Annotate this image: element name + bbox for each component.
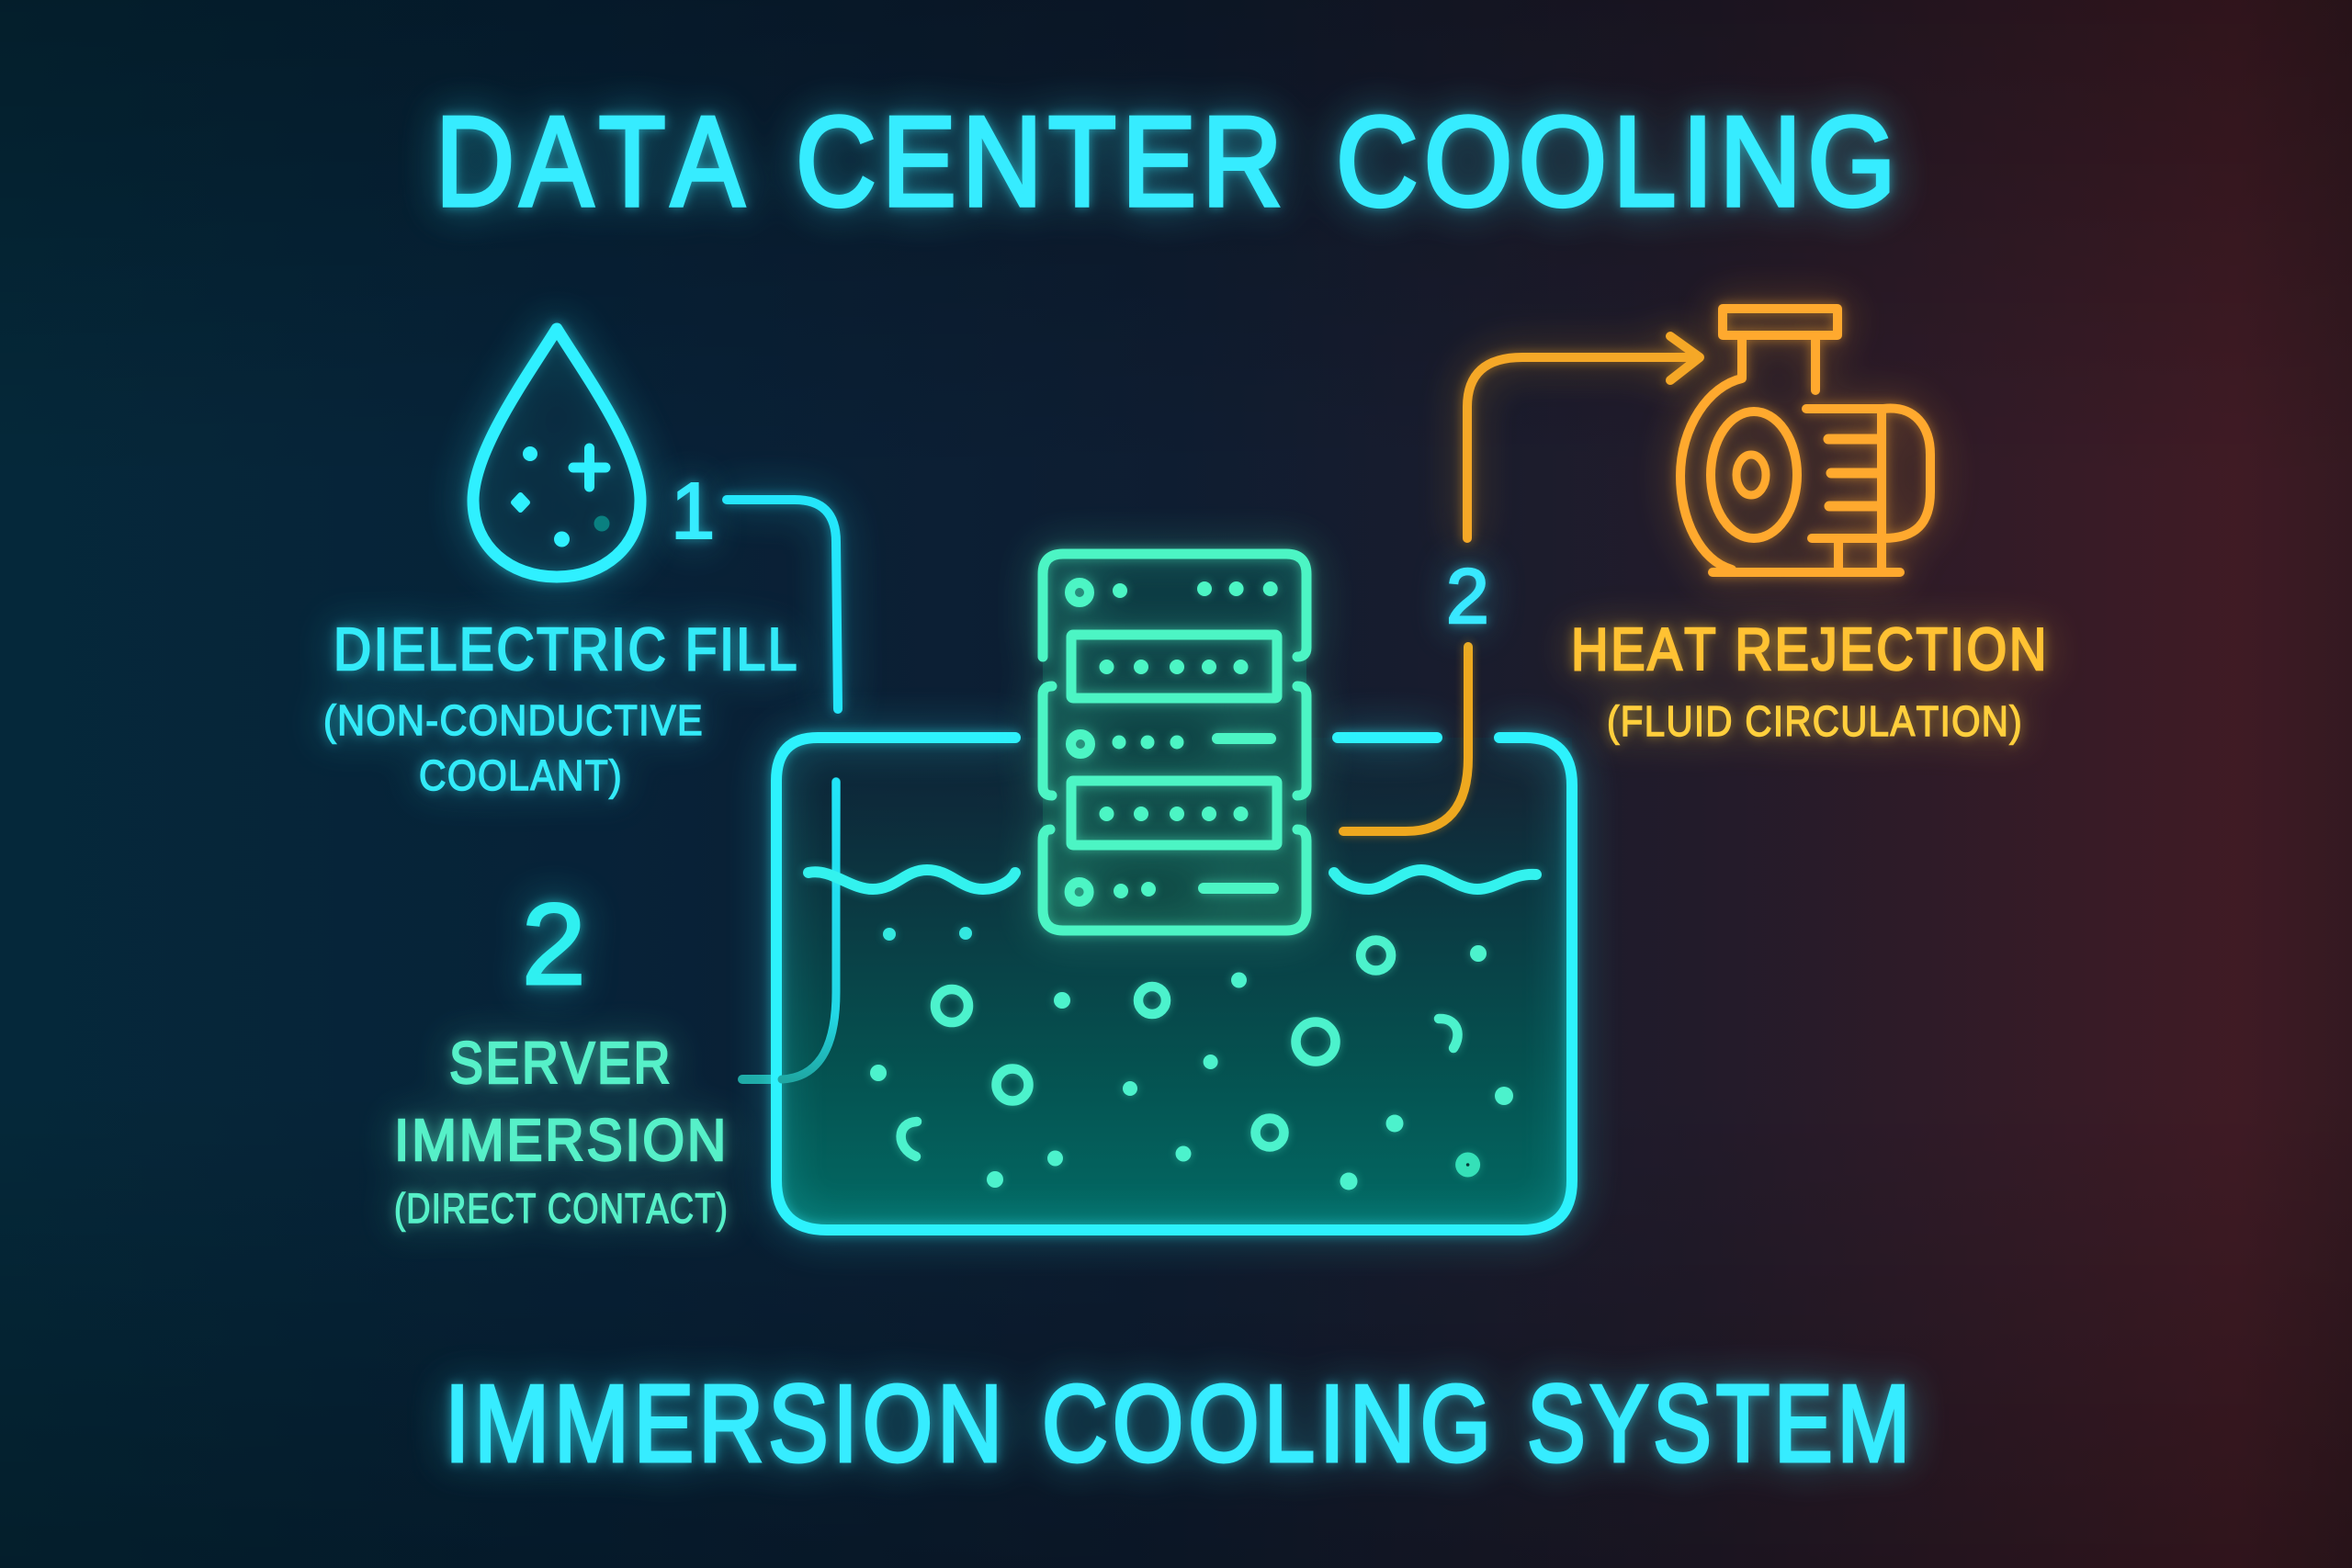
connector: tank outlet xyxy=(1343,647,1468,831)
step number 2 center: 2 xyxy=(1446,553,1489,639)
subtitle: SYSTEM xyxy=(1527,1363,1915,1484)
title xyxy=(435,90,1902,233)
label: server immersion: IMMERSION xyxy=(394,1107,729,1173)
label: dielectric fill xyxy=(323,615,799,799)
server indicator lights xyxy=(1099,581,1278,898)
label: dielectric fill: COOLANT) xyxy=(419,751,623,799)
label: server immersion xyxy=(394,1030,729,1232)
title: COOLING xyxy=(1336,90,1902,233)
title: CENTER xyxy=(796,90,1288,233)
step number 2 left: 2 xyxy=(522,881,586,1009)
label: heat rejection: HEAT REJECTION xyxy=(1571,615,2049,682)
tank liquid fill xyxy=(776,738,1572,1230)
coolant inlet pipe xyxy=(742,782,836,1079)
connector: drop to tank xyxy=(727,500,838,709)
pipe inside tank xyxy=(782,782,836,1079)
label: server immersion: SERVER xyxy=(449,1030,673,1096)
coolant surface waves xyxy=(808,870,1536,889)
subtitle: COOLING xyxy=(1042,1363,1496,1484)
label: server immersion: (DIRECT CONTACT) xyxy=(394,1185,729,1232)
title: DATA xyxy=(435,90,750,233)
icon: pump xyxy=(1680,309,1930,572)
icon: dielectric fluid drop xyxy=(473,329,640,577)
bubbles xyxy=(870,927,1513,1190)
label: heat rejection xyxy=(1571,615,2049,745)
subtitle: IMMERSION xyxy=(445,1363,1007,1484)
arrow: outlet to pump xyxy=(1467,336,1700,538)
step number 1: 1 xyxy=(671,467,715,556)
tank walls xyxy=(776,738,1572,1230)
subtitle xyxy=(445,1363,1915,1484)
label: dielectric fill: (NON-CONDUCTIVE xyxy=(323,696,704,744)
icon: server rack xyxy=(1043,554,1306,931)
label: dielectric fill: DIELECTRIC FILL xyxy=(334,615,799,682)
panel: immersion tank xyxy=(776,738,1572,1230)
label: heat rejection: (FLUID CIRCULATION) xyxy=(1607,697,2023,745)
